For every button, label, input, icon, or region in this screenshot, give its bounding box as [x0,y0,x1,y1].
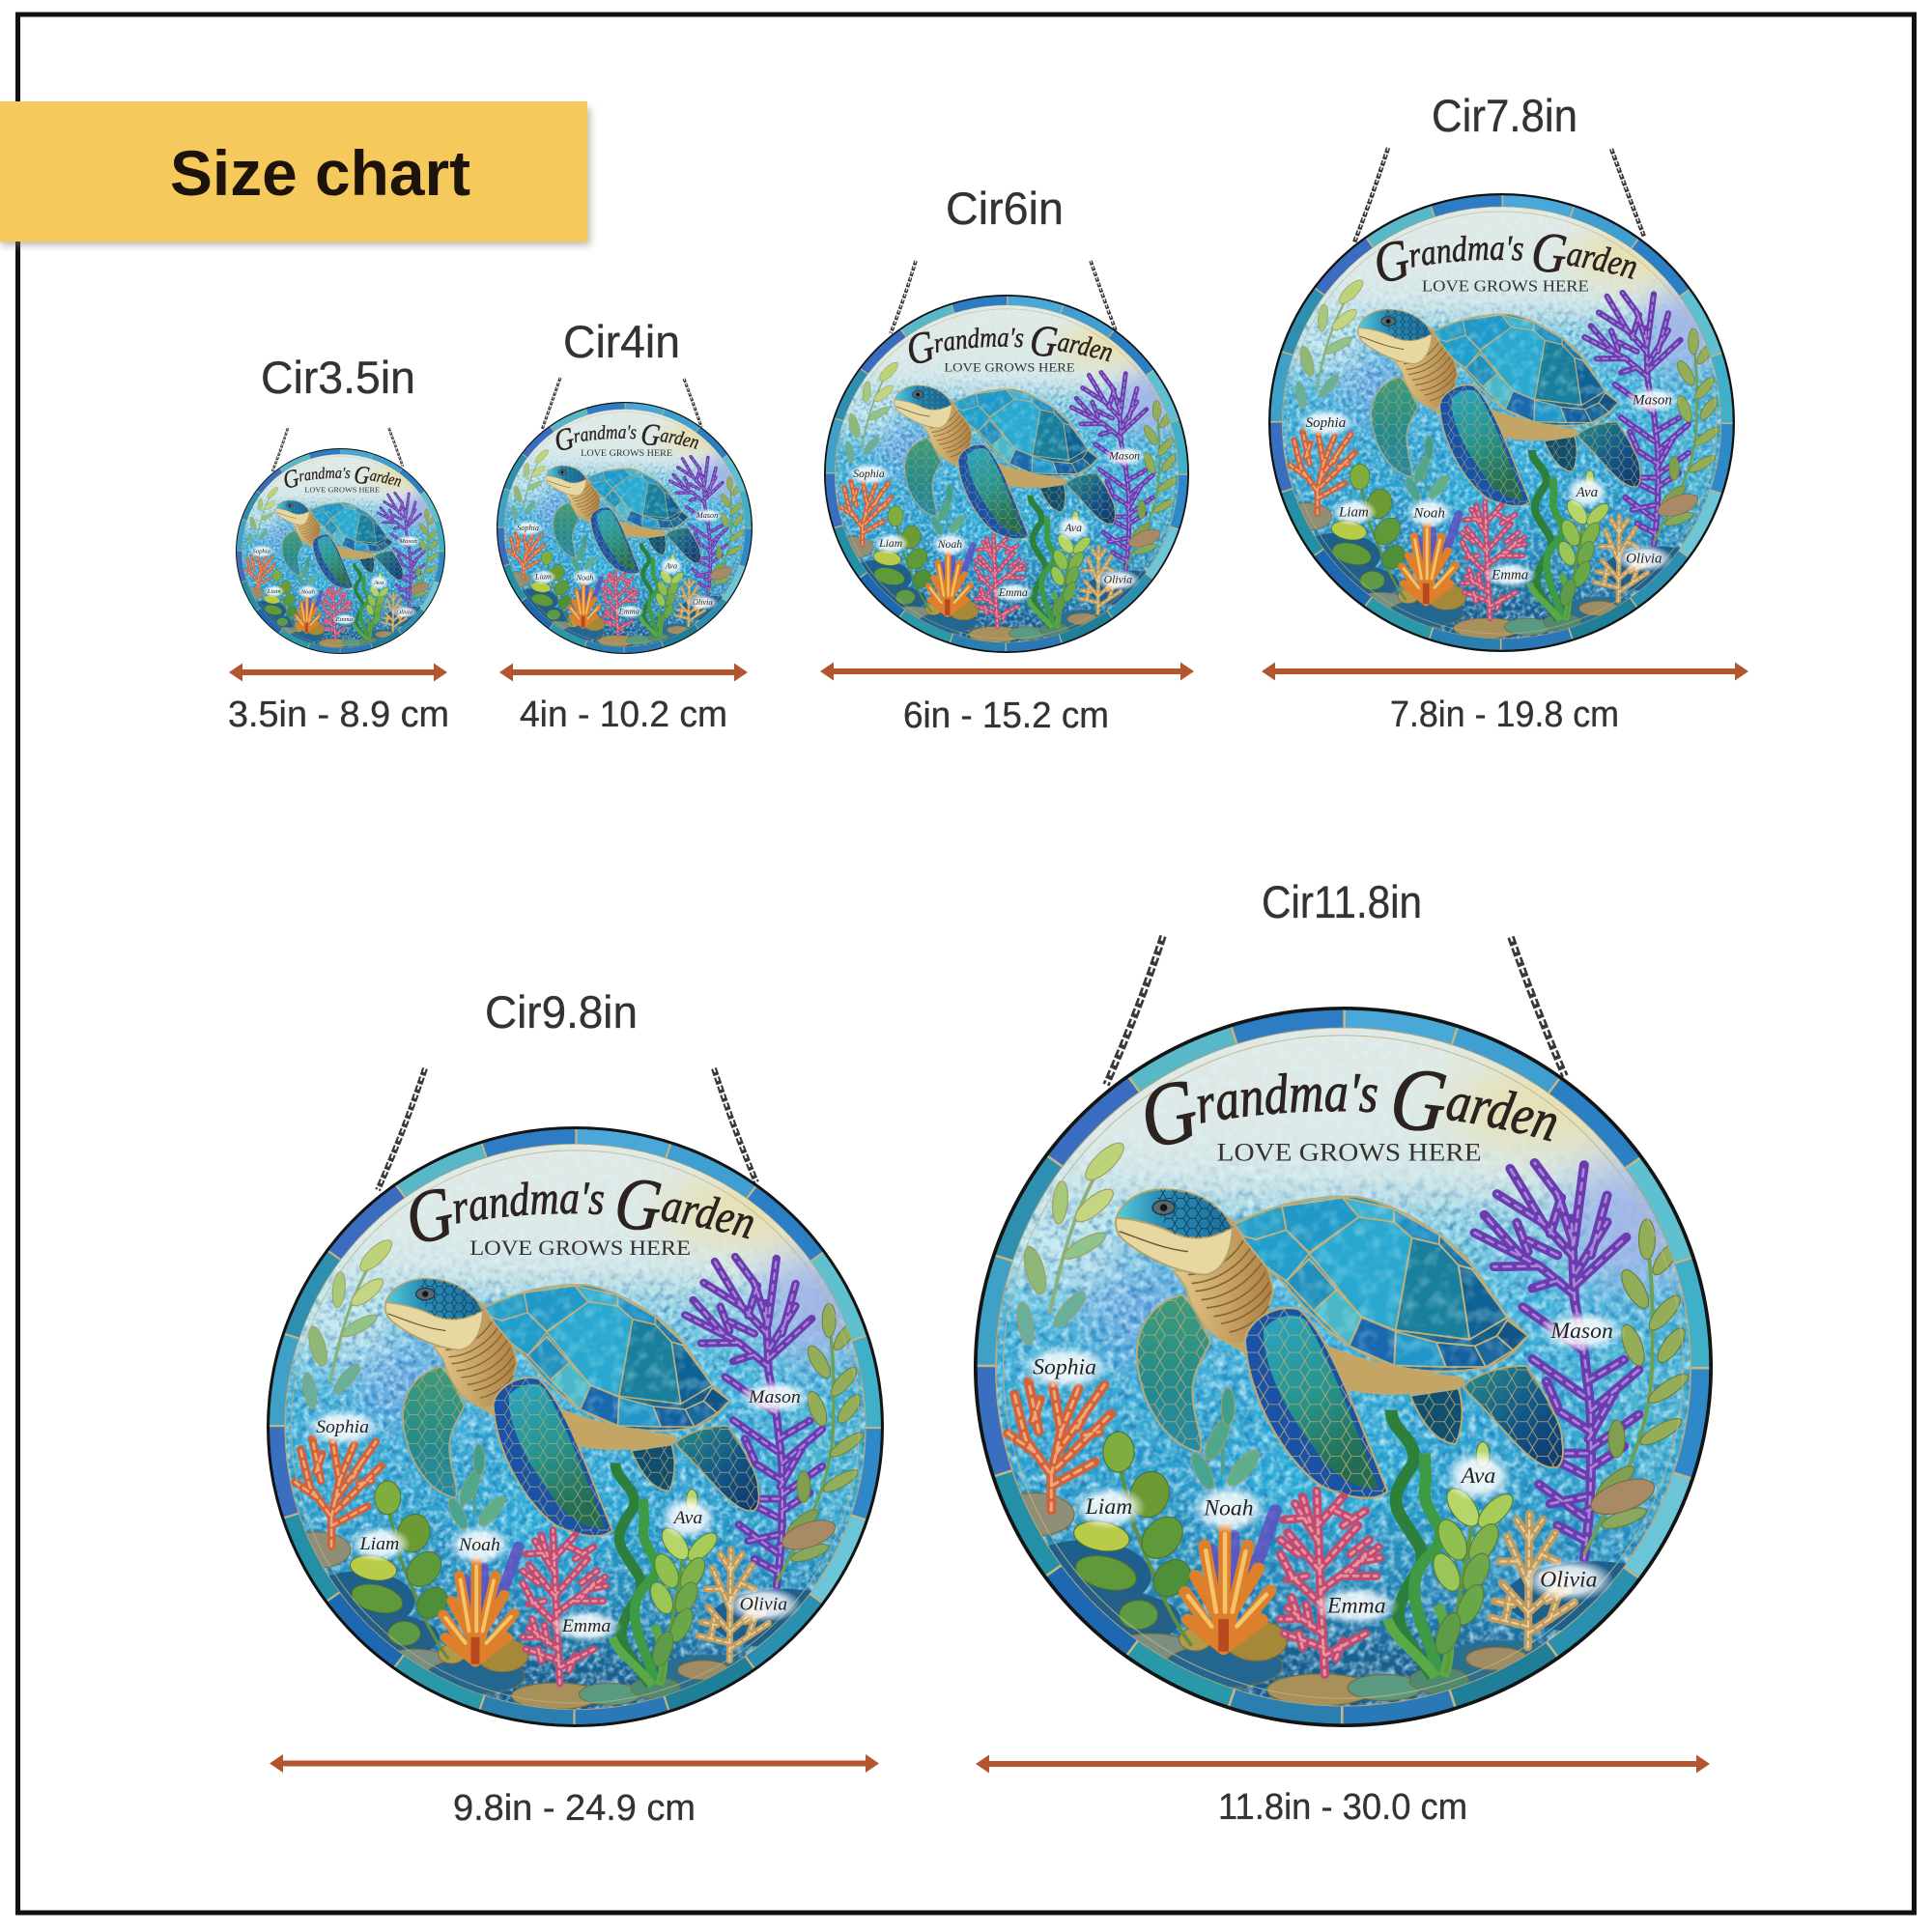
suncatcher disc: Mason [1632,393,1672,408]
suncatcher disc [824,295,1189,653]
suncatcher disc [267,1126,884,1727]
suncatcher disc: LOVE GROWS HERE [1422,277,1589,296]
size heading: Cir4in [563,316,680,367]
suncatcher disc: Olivia [396,610,413,615]
suncatcher disc: Sophia [316,1417,369,1437]
suncatcher disc: G [1146,1082,1196,1146]
suncatcher disc: Sophia [517,524,539,532]
size heading: Cir6in [946,183,1064,234]
product: Cir9.8in [267,986,884,1829]
suncatcher disc [497,402,753,654]
suncatcher disc: Mason [1108,450,1140,463]
dimension label: 9.8in - 24.9 cm [453,1788,696,1829]
product: Cir3.5in [228,352,449,735]
suncatcher disc: Liam [1085,1494,1132,1520]
suncatcher disc: Mason [748,1387,801,1407]
width arrow [499,663,748,682]
suncatcher disc: randma's [934,327,1024,354]
banner: Size chart [0,101,590,245]
suncatcher disc: Ava [1064,522,1082,534]
suncatcher disc: Sophia [853,468,885,480]
suncatcher disc: Olivia [1104,574,1132,586]
suncatcher disc: Emma [561,1616,611,1636]
dimension label: 3.5in - 8.9 cm [228,695,449,735]
suncatcher disc: Emma [1326,1594,1386,1618]
suncatcher disc: arden [1567,246,1636,279]
hanging chains [1354,148,1644,242]
suncatcher disc: Noah [1412,505,1445,521]
suncatcher disc: Liam [1338,505,1369,520]
suncatcher disc: Liam [878,537,902,550]
suncatcher disc: Mason [1549,1319,1613,1344]
suncatcher disc: G [617,1180,662,1231]
suncatcher disc: Emma [1491,568,1528,582]
suncatcher disc: LOVE GROWS HERE [304,486,381,495]
width arrow [229,663,447,682]
suncatcher disc: Olivia [1626,551,1662,566]
suncatcher disc: arden [661,1196,753,1238]
suncatcher disc: randma's [574,425,637,442]
suncatcher disc: Noah [1203,1496,1254,1521]
suncatcher disc: G [355,467,370,484]
suncatcher disc: arden [1057,336,1113,361]
suncatcher disc: LOVE GROWS HERE [469,1236,691,1260]
size heading: Cir7.8in [1432,90,1577,141]
product: Cir6in [820,183,1194,736]
size heading: Cir9.8in [485,986,638,1037]
size heading: Cir3.5in [261,352,415,403]
hanging chains [891,261,1116,333]
suncatcher disc: Sophia [1033,1355,1096,1379]
suncatcher disc: G [908,332,933,363]
width arrow [820,663,1194,680]
suncatcher disc: Ava [1576,485,1598,500]
suncatcher disc: G [284,469,299,488]
suncatcher disc: G [556,428,574,450]
suncatcher disc [1268,193,1735,652]
suncatcher disc: Mason [696,511,718,520]
suncatcher disc: Sophia [252,549,271,555]
suncatcher disc: G [1032,327,1058,356]
suncatcher disc: Ava [665,562,677,571]
banner: Size chart: Size chart [170,137,470,209]
suncatcher disc: Noah [576,573,593,582]
suncatcher disc: Emma [998,586,1028,599]
width arrow [270,1754,879,1773]
width arrow [976,1754,1710,1774]
width arrow [1262,663,1748,680]
hanging chains [542,378,701,430]
suncatcher disc: arden [369,471,402,487]
dimension label: 4in - 10.2 cm [520,695,727,735]
suncatcher disc: Noah [937,538,962,551]
suncatcher disc: Liam [534,573,552,582]
product: Cir11.8in [974,876,1713,1828]
suncatcher disc [974,1007,1713,1727]
suncatcher disc: G [641,424,661,445]
hanging chains [272,428,403,471]
suncatcher disc: arden [661,431,698,449]
suncatcher disc: Ava [373,580,384,586]
suncatcher disc: G [1377,241,1408,282]
suncatcher disc: Ava [672,1508,703,1528]
suncatcher disc: Emma [618,608,639,615]
suncatcher disc [236,448,445,654]
product: Cir4in [497,316,753,735]
suncatcher disc: Liam [267,588,281,595]
dimension label: 11.8in - 30.0 cm [1218,1787,1467,1828]
suncatcher disc: G [1534,234,1567,272]
suncatcher disc: Noah [300,588,316,595]
hanging chains [378,1068,756,1190]
suncatcher disc: LOVE GROWS HERE [944,360,1075,374]
suncatcher disc: arden [1447,1090,1557,1142]
suncatcher disc: randma's [1197,1072,1378,1123]
product: Cir7.8in [1262,90,1748,735]
suncatcher disc: G [410,1188,452,1242]
suncatcher disc: randma's [1409,236,1523,268]
suncatcher disc: randma's [299,468,350,481]
suncatcher disc: G [1394,1070,1447,1131]
dimension label: 6in - 15.2 cm [903,696,1109,736]
suncatcher disc: randma's [453,1181,605,1224]
suncatcher disc: Olivia [693,598,713,607]
suncatcher disc: Liam [359,1534,399,1554]
size heading: Cir11.8in [1262,876,1422,927]
dimension label: 7.8in - 19.8 cm [1390,695,1619,735]
suncatcher disc: LOVE GROWS HERE [1217,1138,1482,1167]
suncatcher disc: Olivia [1540,1568,1597,1592]
suncatcher disc: Emma [335,616,354,623]
hanging chains [1106,936,1565,1085]
suncatcher disc: LOVE GROWS HERE [581,448,672,458]
suncatcher disc: Mason [398,538,417,545]
suncatcher disc: Olivia [740,1595,787,1615]
suncatcher disc: Sophia [1306,415,1346,431]
suncatcher disc: Ava [1460,1463,1495,1489]
suncatcher disc: Noah [458,1535,500,1555]
